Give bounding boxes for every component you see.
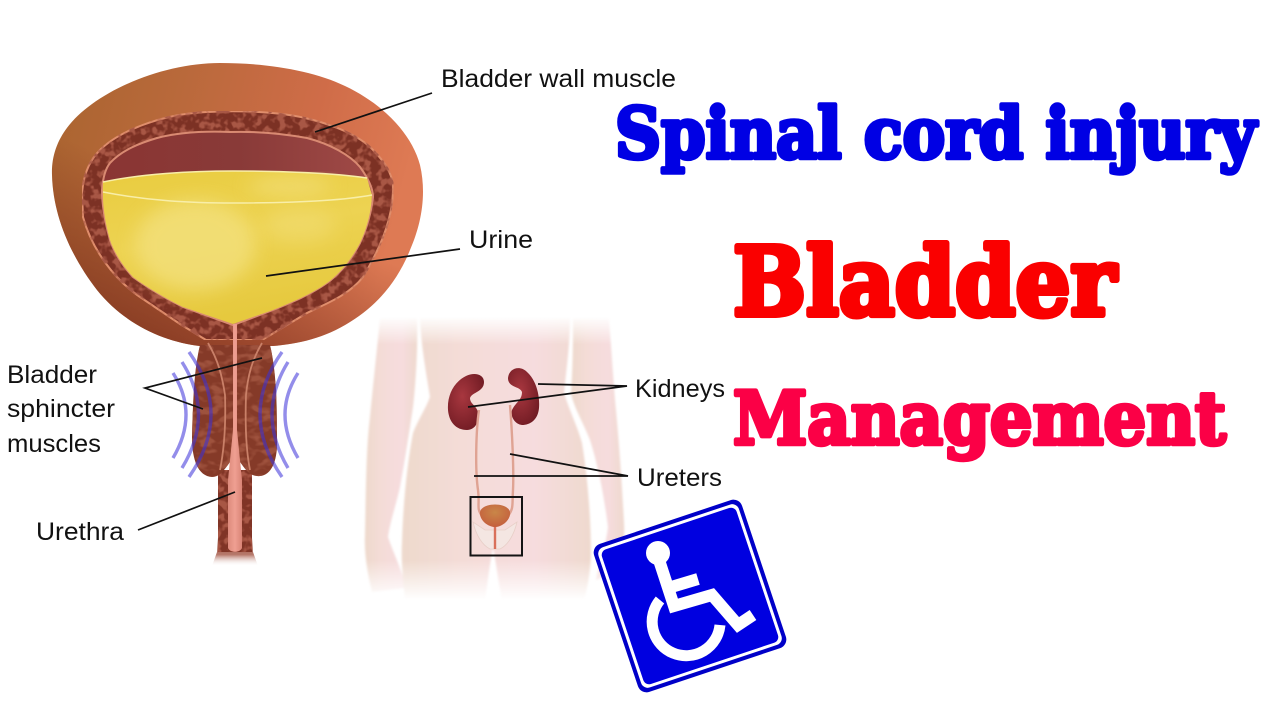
label: ureters	[474, 454, 722, 492]
icon: left kidney of figure	[508, 368, 539, 425]
label: bladder wall muscle: Bladder wall muscle	[441, 65, 676, 93]
label: urine: Urine	[469, 226, 533, 254]
skin silhouette	[365, 318, 624, 600]
label: urethra	[36, 492, 235, 546]
inset box	[470, 497, 522, 556]
urine	[103, 171, 372, 324]
icon: right kidney of figure	[448, 374, 484, 430]
label: bladder sphincter muscles	[7, 358, 262, 458]
label: bladder sphincter muscles: Bladder	[7, 361, 97, 389]
label: kidneys	[468, 375, 725, 407]
label: bladder sphincter muscles: sphincter	[7, 395, 115, 423]
bladder cross-section diagram	[52, 63, 423, 566]
pelvic area	[473, 522, 517, 549]
bladder wall tissue	[82, 111, 393, 340]
icon: wheelchair accessibility sign	[591, 497, 789, 695]
label: urine	[266, 226, 533, 276]
label: bladder sphincter muscles: muscles	[7, 430, 101, 458]
outer bladder muscle	[52, 63, 423, 346]
heading: management: Management	[733, 376, 1226, 462]
ureters	[476, 405, 513, 516]
label: ureters: Ureters	[637, 464, 722, 492]
body figure illustration	[365, 318, 624, 600]
label: kidneys: Kidneys	[635, 375, 725, 403]
heading: bladder: Bladder	[733, 227, 1118, 338]
sphincter muscle edges	[208, 343, 262, 470]
label: bladder wall muscle	[315, 65, 676, 132]
bladder lumen	[102, 132, 373, 325]
mini bladder	[480, 504, 510, 549]
urethra channel	[228, 324, 242, 552]
sphincter contraction arcs	[173, 352, 298, 477]
sphincter body and urethra	[192, 345, 277, 566]
label: urethra: Urethra	[36, 518, 124, 546]
